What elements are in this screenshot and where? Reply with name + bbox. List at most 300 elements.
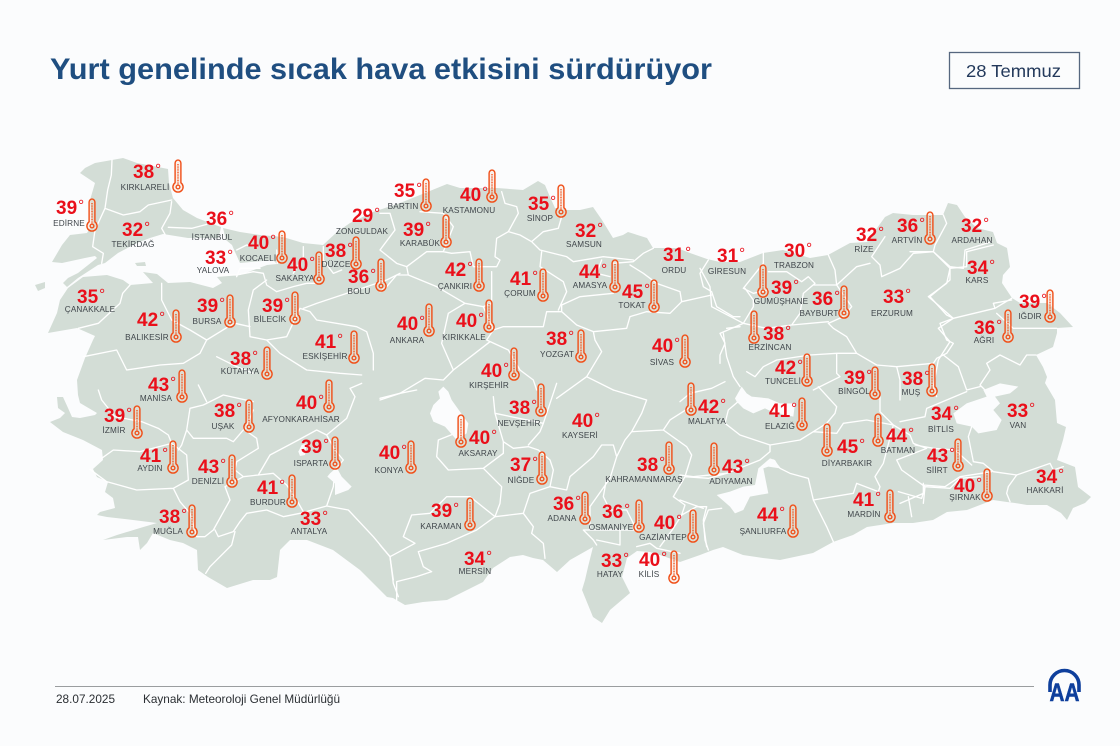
province: Kocaeli <box>240 231 287 263</box>
province: Hatay <box>597 550 629 579</box>
province: Adana: ADANA <box>548 514 577 523</box>
province: Şırnak: 40 <box>954 476 975 497</box>
province: Malatya: ° <box>720 396 726 413</box>
province: Kırıkkale <box>442 300 494 342</box>
province: Burdur <box>250 475 297 507</box>
province: Kırklareli: KIRKLARELİ <box>121 182 169 192</box>
province: Muğla: ° <box>181 506 187 523</box>
province: Tekirdağ <box>111 219 155 249</box>
province: Isparta: 39 <box>301 437 322 458</box>
province: Mardin: 41 <box>853 490 874 511</box>
lake: Keban <box>735 387 795 417</box>
province: Yozgat: YOZGAT <box>540 350 574 359</box>
province: Kilis <box>639 549 679 583</box>
province: Kırklareli <box>121 160 183 192</box>
province: Van <box>1007 400 1035 430</box>
province: Samsun: ° <box>597 220 603 237</box>
province: Ardahan: 32 <box>961 216 982 237</box>
province: Ağrı: AĞRI <box>974 335 994 345</box>
province: Kars: KARS <box>966 276 989 285</box>
province: Ağrı: ° <box>996 317 1002 334</box>
province: Karabük: ° <box>425 219 431 236</box>
lake: Tuz <box>430 387 468 440</box>
province: Adıyaman: ° <box>744 456 750 473</box>
province: İzmir: İZMİR <box>102 425 126 435</box>
province: Rize: ° <box>878 224 884 241</box>
province: Samsun <box>566 220 603 249</box>
province: Kastamonu <box>443 170 497 215</box>
province: Kastamonu: KASTAMONU <box>443 206 495 215</box>
province: Tokat: TOKAT <box>618 301 646 310</box>
province: Karabük: 39 <box>403 220 424 241</box>
province: Kocaeli: ° <box>270 232 276 249</box>
province: Malatya: 42 <box>698 397 719 418</box>
province: Batman: 44 <box>886 426 907 447</box>
province: Muğla: 38 <box>159 507 180 528</box>
province: Batman: ° <box>908 425 914 442</box>
province: Karabük <box>400 215 451 248</box>
province: Çankırı: 42 <box>445 260 466 281</box>
province: Balıkesir <box>125 309 181 342</box>
province: Sakarya: 40 <box>287 255 308 276</box>
province: Bayburt: ° <box>834 288 840 305</box>
province: Bitlis: BİTLİS <box>928 424 954 434</box>
province: Yalova <box>197 247 233 275</box>
province: Kastamonu: ° <box>482 184 488 201</box>
province: Konya: ° <box>401 442 407 459</box>
province: Edirne: ° <box>78 197 84 214</box>
province: Şırnak: ° <box>976 475 982 492</box>
date box <box>950 52 1080 88</box>
province: Kütahya: ° <box>252 348 258 365</box>
province: Konya <box>375 441 416 475</box>
province: Giresun: GİRESUN <box>708 266 746 276</box>
province: Tekirdağ: 32 <box>122 220 143 241</box>
province: Iğdır <box>1018 290 1055 322</box>
province: İstanbul: 36 <box>206 209 227 230</box>
province: Balıkesir: ° <box>159 309 165 326</box>
province labels <box>53 160 1064 583</box>
province: Kars <box>966 257 995 285</box>
province: Hakkari: 34 <box>1036 467 1057 488</box>
province: Samsun: 32 <box>575 221 596 242</box>
logo: AA: AA <box>1050 679 1080 707</box>
province: Eskişehir: 41 <box>315 332 336 353</box>
province: Muş: ° <box>924 368 930 385</box>
province: Hakkari: ° <box>1058 466 1064 483</box>
province: Malatya: MALATYA <box>688 417 726 426</box>
province: Niğde: ° <box>532 454 538 471</box>
province: Manisa: MANİSA <box>140 393 173 403</box>
province: Denizli: ° <box>220 456 226 473</box>
province: Sivas: ° <box>674 335 680 352</box>
province: Tokat <box>618 280 659 312</box>
province: Konya: 40 <box>379 443 400 464</box>
province: Denizli: DENİZLİ <box>192 476 224 486</box>
province: Sinop <box>527 185 566 223</box>
province: Çorum <box>504 268 548 301</box>
province: Giresun: ° <box>739 245 745 262</box>
province: Osmaniye: OSMANİYE <box>589 522 634 532</box>
province: Zonguldak <box>336 205 389 236</box>
province: Bolu <box>348 259 386 296</box>
province: Adıyaman <box>709 443 753 486</box>
province: Denizli: 43 <box>198 457 219 478</box>
province: Düzce <box>322 237 361 269</box>
province: Giresun: 31 <box>717 246 738 267</box>
province: Gümüşhane: ° <box>793 277 799 294</box>
province: Aydın: 41 <box>140 446 161 467</box>
province: Bolu: ° <box>370 266 376 283</box>
province: Yozgat <box>540 328 586 362</box>
province: Adana <box>548 492 590 524</box>
province: Mersin: ° <box>486 548 492 565</box>
province: Ağrı <box>974 310 1013 345</box>
province: Tokat: ° <box>644 281 650 298</box>
province: Isparta <box>294 436 340 469</box>
province: Eskişehir <box>302 331 359 363</box>
province: Sakarya: SAKARYA <box>276 274 315 283</box>
province: Yozgat: ° <box>568 328 574 345</box>
province: Çorum: ° <box>532 268 538 285</box>
province: Bilecik: BİLECİK <box>254 314 287 324</box>
province: Hatay: HATAY <box>597 570 623 579</box>
province: Ankara: ANKARA <box>390 336 425 345</box>
province: Bingöl: ° <box>866 367 872 384</box>
province: Muğla <box>153 505 197 537</box>
province: Batman: BATMAN <box>881 446 915 455</box>
province: Tunceli: 42 <box>775 358 796 379</box>
province: Bingöl: 39 <box>844 368 865 389</box>
province: Siirt: 43 <box>927 446 948 467</box>
province: Çorum: ÇORUM <box>504 289 536 298</box>
province: Niğde: 37 <box>510 455 531 476</box>
province: Uşak: 38 <box>214 401 235 422</box>
province: Çorum: 41 <box>510 269 531 290</box>
province: İstanbul: ° <box>228 208 234 225</box>
province: Kırıkkale: KIRIKKALE <box>442 333 486 342</box>
province: Gümüşhane: 39 <box>771 278 792 299</box>
province: İstanbul <box>192 208 234 242</box>
province: Aydın <box>137 441 178 473</box>
province: Ordu: ORDU <box>662 266 686 275</box>
province: Mardin: MARDİN <box>847 509 881 519</box>
province: Bursa: BURSA <box>193 317 222 326</box>
province: Artvin: ARTVİN <box>892 235 922 245</box>
province: Şırnak: ŞIRNAK <box>949 493 981 502</box>
province: Burdur: 41 <box>257 478 278 499</box>
province: Ardahan: ° <box>983 215 989 232</box>
title: Yurt genelinde sıcak hava etkisini sürdürüyor <box>50 53 712 86</box>
province: Manisa: 43 <box>148 375 169 396</box>
province: Uşak: UŞAK <box>212 422 235 431</box>
province: Hatay: ° <box>623 550 629 567</box>
province: Elazığ <box>765 398 807 431</box>
date box: 28 Temmuz <box>966 61 1061 81</box>
province: Bilecik <box>254 292 300 324</box>
province: Osmaniye <box>589 500 644 532</box>
province: Kayseri: 40 <box>572 411 593 432</box>
province: İzmir <box>102 405 142 438</box>
province: Kars: ° <box>989 257 995 274</box>
province: Muş: 38 <box>902 369 923 390</box>
province: Bartın: BARTIN <box>388 202 418 211</box>
province: Mardin: ° <box>875 489 881 506</box>
logo: AA <box>1050 670 1080 707</box>
province: Çanakkale: ÇANAKKALE <box>65 305 116 314</box>
province: Ordu <box>662 244 691 275</box>
province: Antalya: ° <box>322 508 328 525</box>
province: Yalova: YALOVA <box>197 266 230 275</box>
province: Afyonkarahisar: ° <box>318 392 324 409</box>
province: Çanakkale <box>65 286 116 314</box>
province: Muş <box>902 364 937 397</box>
province: Ardahan <box>951 215 993 245</box>
province: Siirt <box>926 439 963 475</box>
islands <box>35 262 146 291</box>
province: Tunceli <box>765 354 812 386</box>
province: Manisa <box>140 370 187 403</box>
province: Burdur: ° <box>279 477 285 494</box>
province: Amasya <box>573 260 620 292</box>
province: Zonguldak: ° <box>374 205 380 222</box>
province: Mersin <box>459 548 492 576</box>
province: Rize: 32 <box>856 225 877 246</box>
province: Kırşehir <box>469 348 519 390</box>
province: Bingöl: BİNGÖL <box>838 386 870 396</box>
province: Sivas <box>650 335 690 367</box>
province: Muğla: MUĞLA <box>153 526 183 536</box>
province: Erzincan: ° <box>785 323 791 340</box>
province: Gaziantep: ° <box>676 512 682 529</box>
province: Trabzon: TRABZON <box>774 261 814 270</box>
province: Şanlıurfa: 44 <box>757 505 778 526</box>
province: Şırnak <box>949 469 992 502</box>
province: Siirt: ° <box>949 445 955 462</box>
province: Bartın <box>388 179 431 211</box>
province: Nevşehir: 38 <box>509 398 530 419</box>
province: Rize <box>854 224 884 254</box>
province: Ordu: ° <box>685 244 691 261</box>
province: Osmaniye: ° <box>624 501 630 518</box>
province: Kütahya: 38 <box>230 349 251 370</box>
footer date: 28.07.2025 <box>56 693 115 706</box>
province: Batman <box>873 414 915 455</box>
province: Osmaniye: 36 <box>602 502 623 523</box>
province: Denizli <box>192 455 237 487</box>
province: Nevşehir: ° <box>531 397 537 414</box>
province: Kahramanmaraş <box>605 442 683 484</box>
province: Diyarbakır <box>822 424 872 468</box>
province: Mersin: MERSİN <box>459 566 491 576</box>
province: Hakkari <box>1026 466 1064 495</box>
province: Bitlis: 34 <box>931 404 952 425</box>
province: Düzce: 38 <box>325 241 346 262</box>
province: Hatay: 33 <box>601 551 622 572</box>
province: Van: 33 <box>1007 401 1028 422</box>
province: Karaman: ° <box>453 500 459 517</box>
province: Erzurum: ERZURUM <box>871 309 913 318</box>
province: Uşak <box>212 400 254 432</box>
province: Kilis: 40 <box>639 550 660 571</box>
province: Manisa: ° <box>170 374 176 391</box>
province: Edirne: 39 <box>56 198 77 219</box>
province: Düzce: DÜZCE <box>322 259 351 269</box>
province: Karaman <box>420 498 475 531</box>
province: Hakkari: HAKKARİ <box>1026 485 1064 495</box>
province: Elazığ: ° <box>791 400 797 417</box>
province: Kahramanmaraş: 38 <box>637 455 658 476</box>
province: Kütahya <box>221 347 272 379</box>
province: Bartın: 35 <box>394 181 415 202</box>
province: Kayseri: ° <box>594 410 600 427</box>
province: Çanakkale: ° <box>99 286 105 303</box>
province: Nevşehir: NEVŞEHİR <box>497 418 541 428</box>
province: Kahramanmaraş: ° <box>659 454 665 471</box>
province: Aksaray: 40 <box>469 428 490 449</box>
province: Rize: RİZE <box>854 244 874 254</box>
province: Amasya: ° <box>601 261 607 278</box>
province: Giresun <box>708 245 746 276</box>
province: Bolu: 36 <box>348 267 369 288</box>
lake: Atatürk <box>717 458 780 513</box>
province: Gümüşhane <box>754 265 809 306</box>
province: Amasya: AMASYA <box>573 281 608 290</box>
province: Kırşehir: ° <box>503 360 509 377</box>
lake: Eğirdir <box>298 443 307 456</box>
province: Konya: KONYA <box>375 466 404 475</box>
province: Elazığ: ELAZIĞ <box>765 421 795 431</box>
province: Diyarbakır: DİYARBAKIR <box>822 458 872 468</box>
province: Erzincan <box>748 311 792 352</box>
province: Sakarya: ° <box>309 254 315 271</box>
province: Bursa <box>193 295 235 327</box>
province: Diyarbakır: ° <box>859 436 865 453</box>
province: Muş: MUŞ <box>902 388 921 397</box>
province: Yalova: 33 <box>205 248 226 269</box>
province: Edirne: EDİRNE <box>53 218 85 228</box>
province: Antalya: ANTALYA <box>291 527 328 536</box>
province: Iğdır: 39 <box>1019 292 1040 313</box>
province: Kayseri: KAYSERİ <box>562 430 598 440</box>
province: Sakarya <box>276 252 324 284</box>
province: Iğdır: ° <box>1041 291 1047 308</box>
province: Bayburt <box>800 286 849 318</box>
province: Şanlıurfa: ŞANLIURFA <box>740 527 787 536</box>
province: Van: ° <box>1029 400 1035 417</box>
province: Karaman: 39 <box>431 501 452 522</box>
province: Şanlıurfa <box>740 504 798 537</box>
province: Adana: 36 <box>553 494 574 515</box>
province: Artvin <box>892 212 935 245</box>
province: Diyarbakır: 45 <box>837 437 858 458</box>
province: Kırklareli: ° <box>155 161 161 178</box>
province: Adana: ° <box>575 493 581 510</box>
province: Yalova: ° <box>227 247 233 264</box>
province: Ordu: 31 <box>663 245 684 266</box>
province: Çankırı <box>438 259 484 291</box>
province: Erzincan: 38 <box>763 324 784 345</box>
province: Tekirdağ: ° <box>144 219 150 236</box>
province: Niğde <box>508 452 547 485</box>
map of Turkey <box>35 158 1091 623</box>
province borders <box>78 160 1063 600</box>
province: Çanakkale: 35 <box>77 287 98 308</box>
province: Sinop: 35 <box>528 194 549 215</box>
province: Kilis: ° <box>661 549 667 566</box>
province: Düzce: ° <box>347 240 353 257</box>
province: Bingöl <box>838 367 880 399</box>
province: Zonguldak: ZONGULDAK <box>336 227 389 236</box>
province: Kahramanmaraş: KAHRAMANMARAŞ <box>605 475 683 484</box>
lake: Van <box>953 383 1018 433</box>
province: Aksaray: AKSARAY <box>458 449 498 458</box>
province: Bartın: ° <box>416 180 422 197</box>
province: Aydın: ° <box>162 445 168 462</box>
province: Bayburt: 36 <box>812 289 833 310</box>
province: Sivas: SİVAS <box>650 357 675 367</box>
province: Niğde: NİĞDE <box>508 475 535 485</box>
province: İzmir: 39 <box>104 406 125 427</box>
province: İzmir: ° <box>126 405 132 422</box>
province: Aydın: AYDIN <box>137 464 163 473</box>
province: Mardin <box>847 489 895 522</box>
province: Şanlıurfa: ° <box>779 504 785 521</box>
province: Ankara: ° <box>419 313 425 330</box>
province: Tunceli: TUNCELİ <box>765 376 801 386</box>
province: Ankara <box>390 304 434 345</box>
province: Erzurum: ° <box>905 286 911 303</box>
province: Burdur: BURDUR <box>250 498 286 507</box>
province: Artvin: ° <box>919 215 925 232</box>
province: Uşak: ° <box>236 400 242 417</box>
province: Sinop: ° <box>550 193 556 210</box>
province: Karabük: KARABÜK <box>400 238 440 248</box>
province: Kütahya: KÜTAHYA <box>221 366 260 376</box>
province: Adıyaman: ADIYAMAN <box>709 477 753 486</box>
province: Kırşehir: KIRŞEHİR <box>469 380 509 390</box>
province: Kırklareli: 38 <box>133 162 154 183</box>
province: Aksaray <box>456 415 498 458</box>
province: Iğdır: IĞDIR <box>1018 311 1042 321</box>
lake: Beyşehir <box>327 467 352 495</box>
province: Ağrı: 36 <box>974 318 995 339</box>
province: Isparta: ° <box>323 436 329 453</box>
province: Kocaeli: KOCAELİ <box>240 253 276 263</box>
province: Kayseri <box>562 410 600 440</box>
province: Artvin: 36 <box>897 216 918 237</box>
province: Bursa: 39 <box>197 296 218 317</box>
province: Antalya <box>291 508 328 536</box>
province: Karaman: KARAMAN <box>420 522 462 531</box>
province: Mersin: 34 <box>464 549 485 570</box>
province: Kocaeli: 40 <box>248 233 269 254</box>
province: Bursa: ° <box>219 295 225 312</box>
province: Bayburt: BAYBURT <box>800 309 838 318</box>
province: Elazığ: 41 <box>769 401 790 422</box>
province: Erzurum <box>871 286 913 318</box>
province: Kilis: KİLİS <box>639 569 660 579</box>
map landmass: Thrace <box>52 158 221 287</box>
province: Kars: 34 <box>967 258 988 279</box>
province: Trabzon: 30 <box>784 241 805 262</box>
province: Malatya <box>686 383 726 426</box>
province: Balıkesir: 42 <box>137 310 158 331</box>
province: Ardahan: ARDAHAN <box>951 236 993 245</box>
province: Amasya: 44 <box>579 262 600 283</box>
province: Sinop: SİNOP <box>527 213 553 223</box>
province: Afyonkarahisar: AFYONKARAHİSAR <box>262 414 340 424</box>
